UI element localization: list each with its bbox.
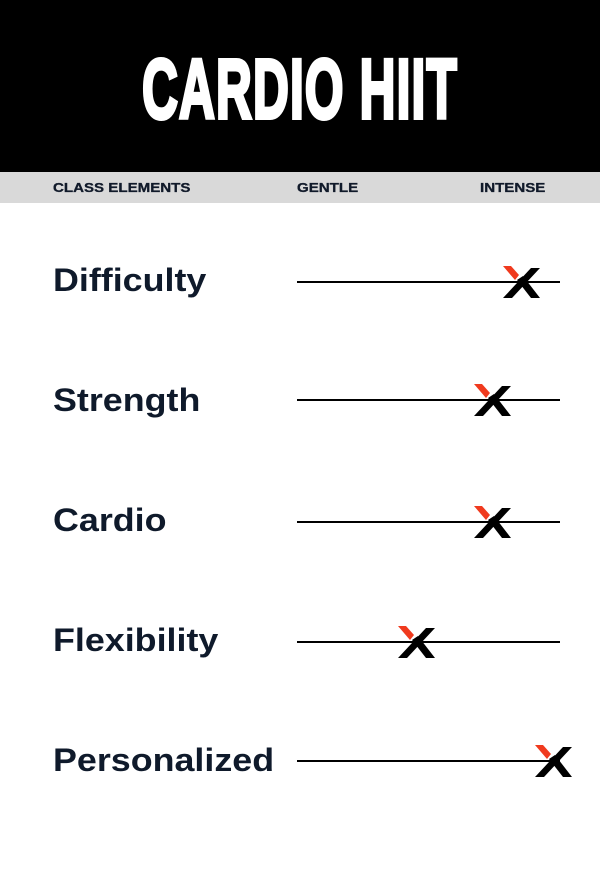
row label: Cardio: Cardio (53, 502, 167, 538)
header: gentle: GENTLE (297, 180, 358, 195)
icon: X marker difficulty (503, 266, 540, 298)
scale line: Flexibility (297, 641, 560, 643)
scale line: Difficulty (297, 281, 560, 283)
icon: X marker personalized (535, 745, 572, 777)
icon: X marker cardio (474, 506, 511, 538)
header: intense: INTENSE (480, 180, 545, 195)
title: CARDIO HIIT (142, 42, 458, 136)
row label: Personalized: Personalized (53, 742, 274, 778)
scale line: Cardio (297, 521, 560, 523)
icon: X marker strength (474, 384, 511, 416)
header: class elements: CLASS ELEMENTS (53, 180, 190, 195)
row label: Strength: Strength (53, 382, 200, 418)
scale line: Strength (297, 399, 560, 401)
row label: Flexibility: Flexibility (53, 622, 218, 658)
icon: X marker flexibility (398, 626, 435, 658)
row label: Difficulty: Difficulty (53, 262, 206, 298)
scale line: Personalized (297, 760, 560, 762)
header (0, 0, 600, 172)
column header band (0, 172, 600, 203)
